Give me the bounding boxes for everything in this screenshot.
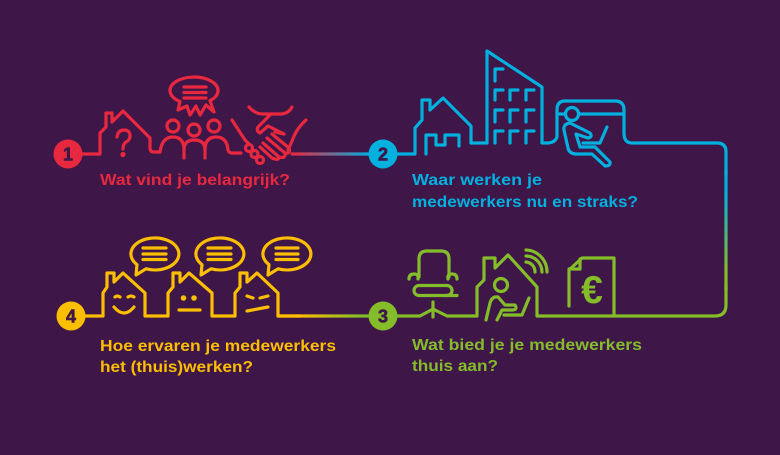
heading: step 2: [412, 172, 638, 211]
speech bubble: red: [170, 77, 218, 115]
icon: wifi signal: [526, 250, 547, 272]
heading: step 4: Hoe ervaren je medewerkers: [100, 338, 336, 355]
three houses outline: [85, 273, 300, 316]
number badge 2: 2: [378, 144, 388, 164]
heading: step 4: het (thuis)werken?: [100, 359, 253, 376]
heading: step 3: thuis aan?: [412, 358, 498, 375]
step 4: employee experience: [56, 238, 336, 376]
icon: handshake: [232, 107, 306, 164]
heading: step 3: Wat bied je je medewerkers: [412, 337, 642, 354]
house with question mark: [82, 111, 160, 156]
heading: step 2: medewerkers nu en straks?: [412, 194, 638, 211]
icon: person with laptop in chair: [557, 108, 624, 166]
euro sign: €: [581, 269, 603, 312]
connector: step 1 to step 2: [292, 152, 372, 156]
face: happy: [114, 296, 134, 313]
speech bubbles: yellow: [131, 238, 311, 275]
heading: step 4: [100, 338, 336, 376]
baseline with house outline: [398, 255, 726, 316]
heading: step 1: Wat vind je belangrijk?: [100, 172, 290, 189]
icon: euro document: [569, 258, 614, 315]
step 2: where employees work: [368, 51, 726, 211]
icon: person working at home: [486, 278, 529, 320]
number badge 1: [54, 140, 82, 168]
connector: step 2 to step 3: [724, 170, 728, 290]
connector: step 4 to step 3: [278, 314, 372, 318]
heading: step 3: [412, 337, 642, 375]
number badge 4: 4: [66, 306, 76, 326]
number badge 3: 3: [378, 306, 388, 326]
number badge 2: [368, 140, 398, 168]
face: annoyed: [247, 296, 268, 311]
heading: step 2: Waar werken je: [412, 172, 542, 189]
group of three people: [160, 120, 241, 158]
number badge 3: [368, 302, 398, 330]
face: neutral: [179, 297, 200, 310]
office windows: [495, 69, 534, 143]
step 1: what matters: [54, 77, 306, 189]
number badge 4: [56, 302, 86, 330]
house and office outline: [398, 51, 726, 175]
number badge 1: 1: [63, 144, 73, 164]
icon: office chair: [409, 251, 457, 317]
step 3: home provisions: [368, 250, 726, 375]
